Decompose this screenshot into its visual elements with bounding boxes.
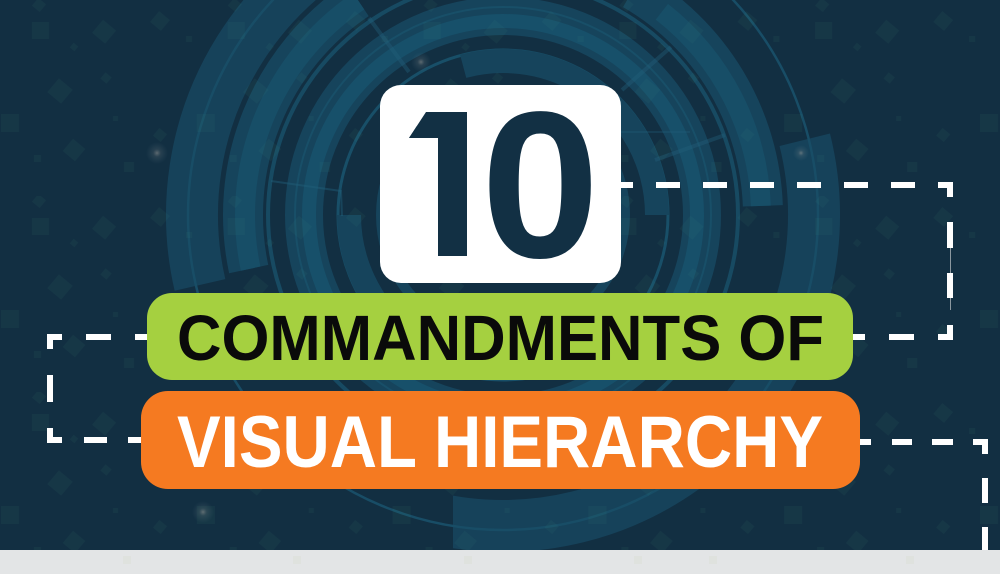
glow spots (146, 52, 809, 523)
number badge (380, 85, 621, 283)
dashed connector: orange banner to next section (860, 439, 988, 550)
number 10: 1 (388, 68, 504, 301)
dashed connector: number to green banner (621, 182, 953, 340)
green banner (147, 293, 853, 380)
heading: commandments of: COMMANDMENTS OF (177, 302, 824, 374)
bottom light strip (0, 550, 1000, 574)
heading: visual hierarchy: VISUAL HIERARCHY (177, 402, 823, 483)
number 10 (409, 111, 591, 259)
orange banner (141, 391, 860, 489)
number 10: 0 (481, 68, 600, 302)
concentric ring graphic (166, 0, 840, 550)
dashed connector: green banner to orange banner (47, 334, 147, 443)
